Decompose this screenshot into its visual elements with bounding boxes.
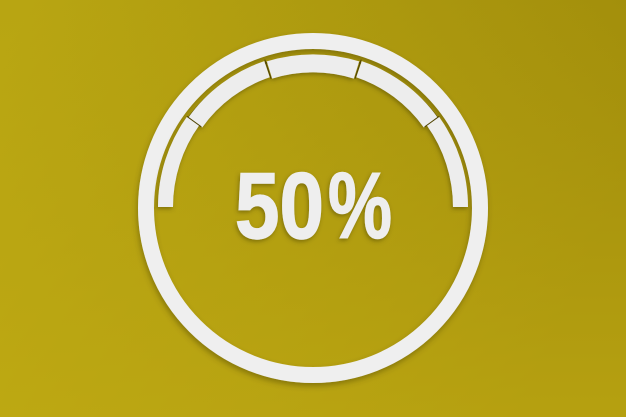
segment: far left: [165, 121, 193, 207]
segment: upper left: [195, 69, 267, 122]
segment: upper right: [359, 69, 431, 122]
segment: far right: [433, 121, 460, 207]
gauge shadow line: [180, 56, 446, 130]
outer ring: [146, 41, 480, 375]
percentage label: [235, 153, 392, 258]
gauge segments: [165, 63, 460, 207]
segment separators: [187, 60, 439, 127]
percent sign: %: [328, 153, 392, 258]
segment: top: [270, 63, 356, 70]
number 50: 50: [235, 153, 324, 258]
